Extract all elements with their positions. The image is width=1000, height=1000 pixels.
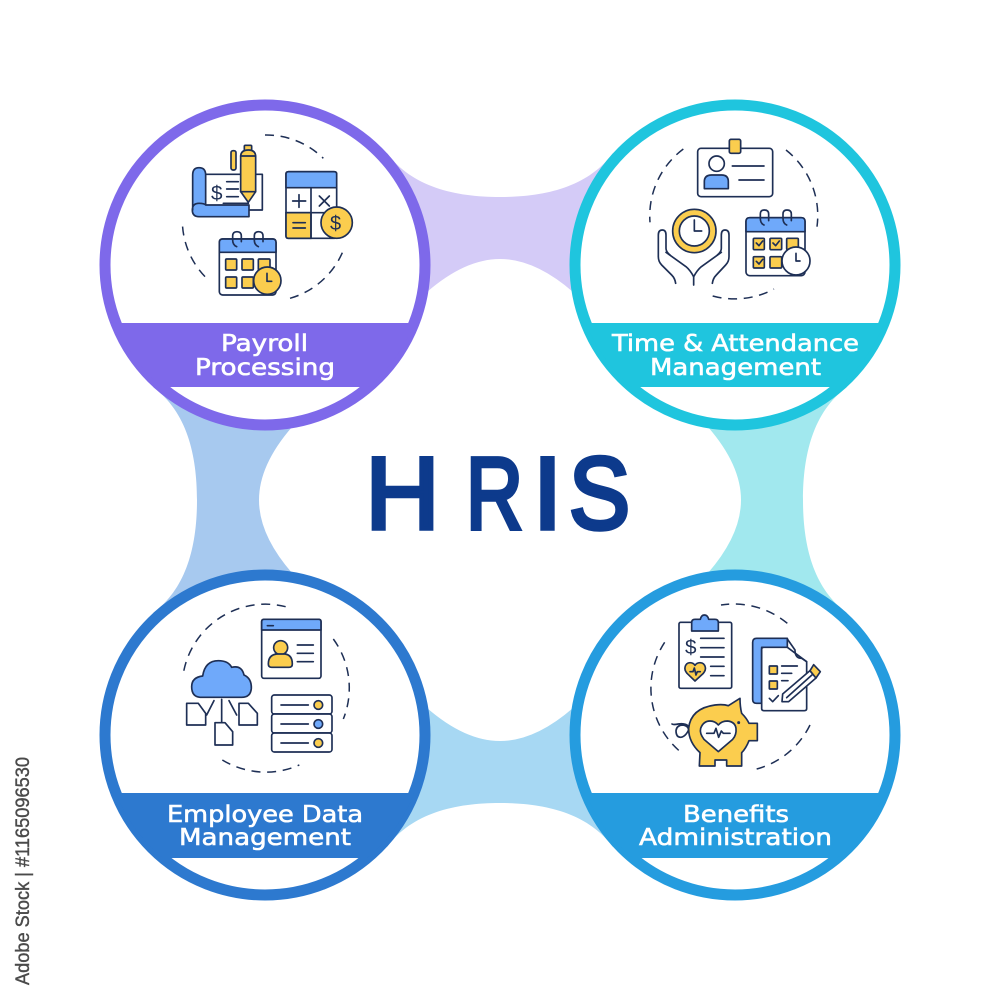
connector: payroll to employee data xyxy=(153,387,300,613)
connector: payroll to time and attendance xyxy=(387,153,613,300)
title: HRIS: S xyxy=(569,436,630,550)
label: payroll processing: Payroll xyxy=(221,329,308,357)
label band: time and attendance xyxy=(592,323,878,387)
label: time and attendance management: Time & Attendance xyxy=(611,329,859,357)
icon: checklist with pencil xyxy=(753,638,820,711)
icon: profile window xyxy=(262,619,321,678)
icon: clock in hands xyxy=(658,209,729,285)
title: HRIS: I xyxy=(533,436,562,550)
circle: employee data xyxy=(105,575,425,895)
label: time and attendance management: Management xyxy=(650,353,821,381)
icon group: employee data xyxy=(183,604,349,772)
dashed ring xyxy=(650,149,818,299)
label band: payroll xyxy=(122,323,408,387)
panel: payroll processing xyxy=(100,105,430,425)
label band: employee data xyxy=(122,793,408,858)
icon: benefits clipboard xyxy=(679,615,732,688)
title: HRIS: H xyxy=(366,436,440,550)
icon: calculator with coin xyxy=(286,172,352,238)
panel: employee data management xyxy=(100,575,430,895)
icon group: payroll xyxy=(182,135,352,298)
dashed ring xyxy=(651,604,810,769)
panel: benefits administration xyxy=(570,575,900,895)
label: employee data management: Employee Data xyxy=(167,800,363,828)
panel: time and attendance management xyxy=(570,105,900,425)
side credit and image id: Adobe Stock | #1165096530 xyxy=(13,757,34,985)
icon: attendance calendar xyxy=(746,210,810,276)
circle: payroll xyxy=(105,105,425,425)
icon: calendar with clock xyxy=(219,232,281,295)
icon: cloud with files xyxy=(187,661,257,745)
icon: cheque and pen xyxy=(192,145,262,217)
icon group: time and attendance xyxy=(650,139,818,299)
circle: time and attendance xyxy=(575,105,895,425)
label: payroll processing: Processing xyxy=(195,353,335,381)
title: HRIS: R xyxy=(466,436,523,550)
icon: piggy bank with heart xyxy=(672,698,757,766)
icon group: benefits xyxy=(651,604,820,769)
connector: employee data to benefits xyxy=(387,700,613,847)
icon: cheque and pen: $ xyxy=(211,182,223,205)
icon: database server xyxy=(272,695,332,752)
connector: time and attendance to benefits xyxy=(700,387,847,613)
dashed ring xyxy=(182,135,342,298)
label: benefits administration: Benefits xyxy=(683,800,789,828)
label: benefits administration: Administration xyxy=(639,823,832,851)
icon: calculator with coin: $ xyxy=(330,213,341,235)
circle: benefits xyxy=(575,575,895,895)
icon: benefits clipboard: $ xyxy=(685,636,697,659)
dashed ring xyxy=(183,604,349,772)
label: employee data management: Management xyxy=(179,823,351,851)
icon: id badge xyxy=(698,139,773,197)
label band: benefits xyxy=(592,793,878,858)
